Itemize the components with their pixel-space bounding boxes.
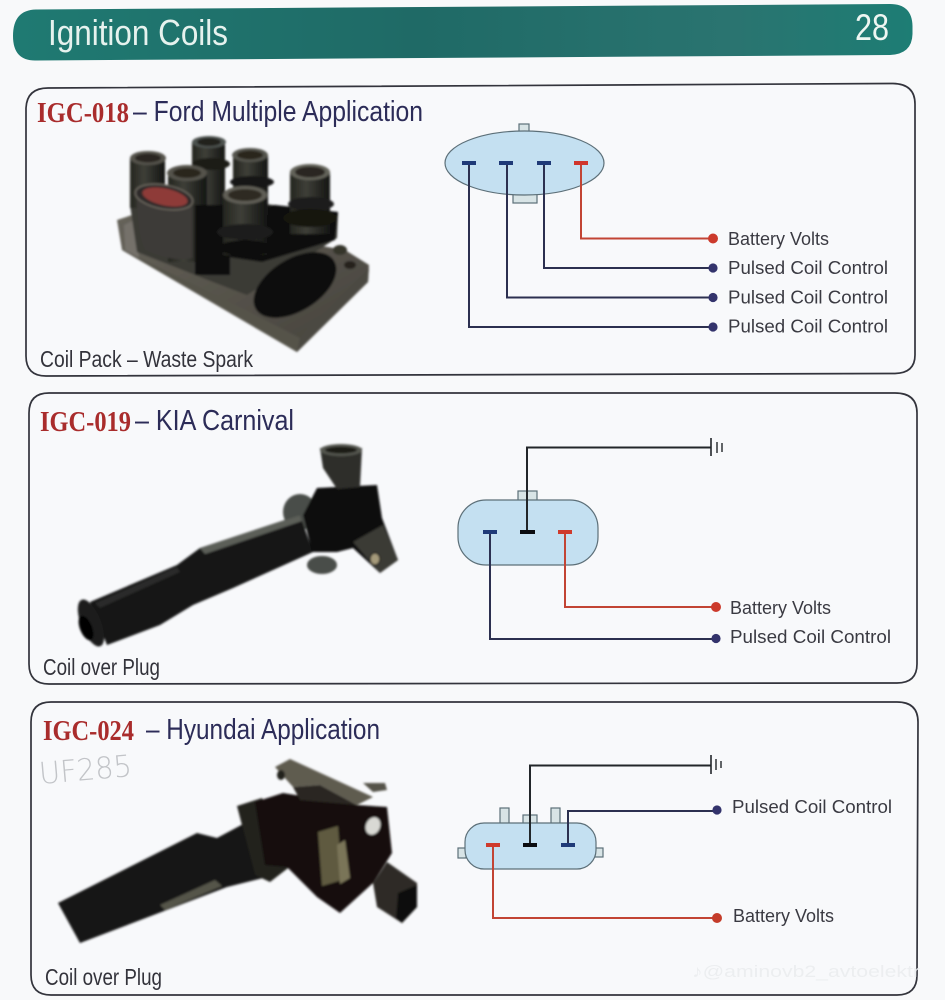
ground symbol bbox=[711, 755, 721, 774]
caption: Coil Pack - Waste Spark: Coil Pack – Waste Spark bbox=[40, 346, 253, 372]
wires bbox=[469, 163, 713, 327]
tower middle left bbox=[167, 165, 230, 275]
heading: IGC-024 Hyundai Application: – Hyundai Application bbox=[146, 714, 380, 746]
heading: IGC-019 KIA Carnival: – KIA Carnival bbox=[135, 405, 294, 437]
labels: Battery Volts bbox=[733, 906, 834, 926]
handwritten note: UF285: UF285 bbox=[38, 749, 133, 792]
tower back centre bbox=[192, 136, 230, 212]
heading: IGC-018 Ford Multiple Application: IGC-018 bbox=[37, 97, 129, 129]
watermark: ♪@aminovb2_avtoelektr bbox=[692, 962, 920, 981]
tower back right bbox=[230, 148, 274, 215]
heading: Ignition Coils: Ignition Coils bbox=[48, 12, 228, 53]
ground symbol bbox=[711, 438, 722, 456]
panel: IGC-024 bbox=[31, 702, 918, 995]
page number: 28 bbox=[855, 7, 889, 48]
wires bbox=[493, 766, 717, 918]
tower right bbox=[283, 164, 337, 234]
heading: IGC-018 Ford Multiple Application bbox=[37, 96, 423, 129]
header banner bbox=[13, 4, 912, 61]
wiring diagram: four pin connector bbox=[445, 124, 888, 336]
labels: Pulsed Coil Control bbox=[730, 627, 891, 647]
tower front bbox=[217, 186, 273, 256]
photo: coil pack bbox=[117, 136, 369, 352]
heading: IGC-024 Hyundai Application: IGC-024 bbox=[43, 715, 134, 747]
labels: Pulsed Coil Control bbox=[728, 258, 888, 278]
terminal dots bbox=[711, 602, 721, 643]
labels bbox=[732, 797, 892, 926]
labels: Battery Volts bbox=[728, 229, 829, 249]
pins bbox=[462, 161, 588, 165]
pins bbox=[483, 530, 572, 534]
photo: coil over plug bbox=[72, 444, 398, 650]
wiring diagram: three pin connector bbox=[458, 438, 891, 647]
panel: IGC-019 bbox=[29, 393, 917, 684]
tower back left bbox=[130, 151, 166, 208]
caption: Coil over Plug: Coil over Plug bbox=[43, 654, 160, 680]
caption: Coil over Plug: Coil over Plug bbox=[45, 964, 162, 990]
heading: IGC-019 KIA Carnival bbox=[40, 405, 294, 438]
terminal dots bbox=[708, 234, 718, 332]
connector bbox=[458, 808, 603, 869]
connector bbox=[445, 124, 604, 203]
photo: coil over plug bbox=[58, 759, 417, 943]
wiring diagram: three pin connector with side tabs bbox=[458, 755, 892, 926]
heading: IGC-019 KIA Carnival: IGC-019 bbox=[40, 406, 131, 438]
pins bbox=[486, 843, 575, 847]
labels bbox=[728, 229, 888, 336]
wires bbox=[490, 448, 716, 639]
red connector bbox=[133, 180, 195, 259]
labels: Pulsed Coil Control bbox=[732, 797, 892, 817]
terminal dots bbox=[712, 805, 722, 923]
panel: IGC-018 bbox=[26, 84, 915, 376]
heading: IGC-024 Hyundai Application bbox=[43, 714, 380, 747]
labels: Battery Volts bbox=[730, 598, 831, 618]
labels: Pulsed Coil Control bbox=[728, 288, 888, 308]
labels bbox=[730, 598, 891, 647]
labels: Pulsed Coil Control bbox=[728, 316, 888, 336]
heading: IGC-018 Ford Multiple Application: – Ford Multiple Application bbox=[133, 96, 423, 128]
connector bbox=[458, 491, 598, 565]
